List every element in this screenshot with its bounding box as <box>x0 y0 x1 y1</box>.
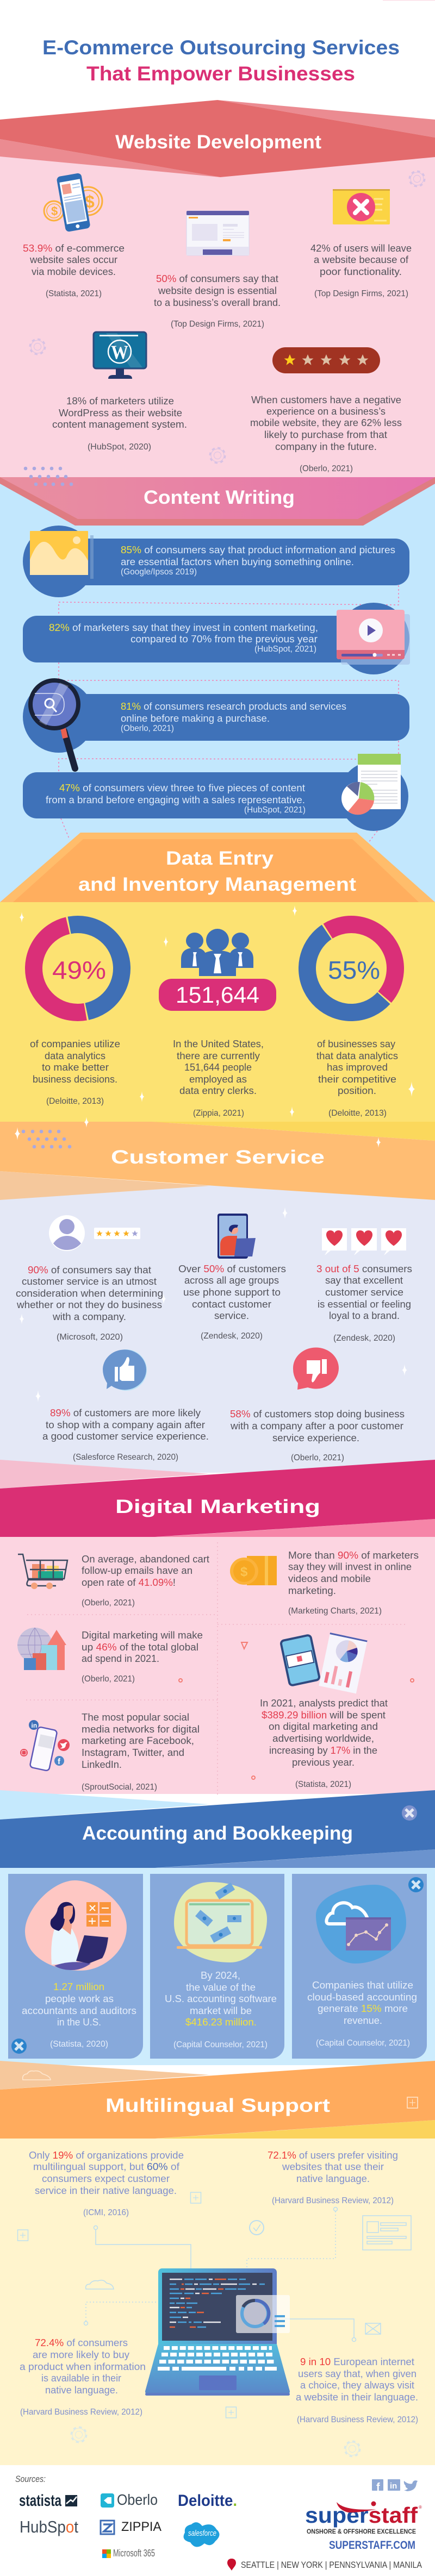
title <box>42 0 435 85</box>
icon: wordpress monitor <box>94 332 146 379</box>
icon: plus card on banner <box>407 2097 418 2108</box>
icon: cross badge blue <box>11 2039 27 2054</box>
stat: 90% of consumers: (Microsoft, 2020) <box>57 1333 123 1342</box>
stat: negative mobile experience: experience on a business’s <box>266 406 386 417</box>
chart: 55% donut: 55% <box>328 956 380 984</box>
stat: global ad spend: (Oberlo, 2021) <box>82 1674 135 1684</box>
stat: mobile sales: website sales occur <box>29 254 117 265</box>
stat: 19% of organizations: (ICMI, 2016) <box>83 2208 129 2217</box>
icon: three people <box>181 929 253 976</box>
icon: gold coins <box>230 1556 277 1585</box>
stat: social networks: (SproutSocial, 2021) <box>82 1783 157 1792</box>
stat: social networks: media networks for digital <box>82 1724 200 1735</box>
icon: error card <box>333 189 390 224</box>
stat: marketing spend: previous year. <box>292 1757 355 1768</box>
heading: content writing: Content Writing <box>144 487 295 508</box>
icon: heart speech bubbles <box>322 1228 406 1255</box>
title: E-Commerce Outsourcing Services <box>42 36 400 59</box>
text: 82% <box>49 622 318 654</box>
heading: multilingual support: Multilingual Support <box>105 2095 330 2116</box>
stat: phone support: use phone support to <box>183 1287 281 1298</box>
banner: website development <box>0 100 435 177</box>
stat: marketing spend: In 2021, analysts predict that <box>260 1698 388 1709</box>
stat: competitive position: of businesses say <box>317 1039 395 1049</box>
icon: thumbs down bubble <box>293 1347 339 1390</box>
text: 85% <box>121 545 395 577</box>
icon: shopping cart <box>18 1554 67 1589</box>
icon: video player <box>337 610 410 665</box>
text: 1.27 million: people work as <box>45 1993 114 2004</box>
icon: avatar with rating <box>49 1215 140 1251</box>
chart: 49% donut: 49% <box>52 956 106 984</box>
text: 81%: 81% of consumers research products and services <box>121 701 346 712</box>
stat: 72.1% of users: (Harvard Business Review, 2012) <box>272 2196 394 2205</box>
heading: digital marketing: Digital Marketing <box>115 1496 320 1517</box>
icon: phone support agent <box>217 1214 256 1259</box>
icon: phone with coins: $ <box>51 204 58 218</box>
stat: negative mobile experience <box>250 395 402 473</box>
stat: 72.1% of users: websites that use their <box>282 2161 384 2172</box>
stat: data analytics decisions: of companies utilize <box>30 1039 120 1049</box>
icon: gears <box>30 171 425 463</box>
stat: 19% of organizations <box>29 2150 184 2217</box>
banner: data entry <box>0 833 435 902</box>
website link: SUPERSTAFF.COM <box>329 2539 415 2552</box>
stat: abandoned cart emails: open rate of 41.09%! <box>82 1577 176 1588</box>
stat: phone support: (Zendesk, 2020) <box>201 1331 263 1341</box>
text: 15% more revenue: cloud-based accounting <box>307 1992 417 2003</box>
panel: multilingual support <box>0 2061 435 2465</box>
stat: phone support: Over 50% of customers <box>178 1264 286 1274</box>
stat: online videos <box>288 1550 419 1616</box>
icon: wordpress monitor: W <box>111 341 128 363</box>
stat: global ad spend: Digital marketing will make <box>82 1630 203 1641</box>
text: 82%: compared to 70% from the previous year <box>130 634 318 645</box>
stat: 19% of organizations: multilingual support, but 60% of <box>33 2161 180 2172</box>
code lines <box>170 2279 265 2327</box>
stat: 58% stop doing business: with a company after a poor customer <box>230 1421 403 1431</box>
panel: website development <box>0 100 435 479</box>
stat: marketing spend: advertising worldwide, <box>272 1733 374 1744</box>
icon: tablet report and phone <box>281 1633 368 1693</box>
text: software market: $416.23 million. <box>185 2017 257 2028</box>
stat: 89% shop again: a good customer service experience. <box>42 1431 209 1442</box>
stat: 3 out of 5: loyal to a brand. <box>329 1310 400 1321</box>
stat: website design: (Top Design Firms, 2021) <box>171 320 264 329</box>
stat: social networks: The most popular social <box>82 1712 189 1723</box>
text: 1.27 million: accountants and auditors <box>22 2005 136 2016</box>
stat: 89% shop again: (Salesforce Research, 2020) <box>73 1453 178 1462</box>
stat: mobile sales: 53.9% of e-commerce <box>23 243 125 254</box>
stat: 90% of consumers: with a company. <box>52 1311 126 1322</box>
panel: customer service <box>0 1117 435 1473</box>
card: product information <box>23 526 409 597</box>
stat: data entry clerks <box>173 1039 264 1118</box>
logo: superstaff: superstaff <box>305 2503 418 2528</box>
text: 15% more revenue: Companies that utilize <box>312 1980 413 1991</box>
stat: wordpress: 18% of marketers utilize <box>66 396 174 407</box>
text: software market: By 2024, <box>201 1970 240 1981</box>
logo: hubspot: HubSpot <box>20 2517 78 2536</box>
stat: 90% of consumers: 90% of consumers say that <box>28 1265 151 1276</box>
stat: mobile sales: via mobile devices. <box>32 266 116 277</box>
logo: superstaff: ONSHORE & OFFSHORE EXCELLENCE <box>307 2528 416 2535</box>
sources label: Sources: <box>15 2474 46 2484</box>
stat: global ad spend: up 46% of the total global <box>82 1642 198 1653</box>
stat: abandoned cart emails <box>82 1554 209 1608</box>
stat: phone support: across all age groups <box>184 1275 279 1286</box>
social icons: f <box>376 2481 380 2493</box>
stat: global ad spend <box>82 1630 203 1684</box>
stat: 72.4% of consumers: is available in their <box>41 2373 121 2384</box>
stat: online videos: (Marketing Charts, 2021) <box>288 1606 382 1616</box>
text: 47% <box>46 783 306 815</box>
text: 15% more revenue: (Capital Counselor, 2021) <box>316 2039 410 2048</box>
banner: content writing <box>0 477 435 526</box>
decorative dots and sparkles <box>15 1117 407 1402</box>
stat: phone support: service. <box>214 1310 249 1321</box>
text: software market: (Capital Counselor, 2021) <box>173 2040 268 2049</box>
stat: 58% stop doing business: 58% of customers stop doing business <box>230 1409 405 1420</box>
icon: social media phone <box>20 1720 70 1771</box>
stat: 3 out of 5 <box>316 1264 412 1343</box>
stat: competitive position: that data analytics <box>316 1051 398 1061</box>
logo: salesforce <box>184 2522 220 2547</box>
stat: 3 out of 5: customer service <box>325 1287 403 1298</box>
text: 1.27 million: in the U.S. <box>57 2017 101 2028</box>
stat: website design: to a business’s overall brand. <box>154 297 281 308</box>
banner: digital marketing <box>0 1460 435 1537</box>
text: software market: market will be <box>190 2005 252 2016</box>
stat: 72.1% of users: 72.1% of users prefer visiting <box>268 2150 398 2161</box>
stat: poor functionality <box>310 243 412 298</box>
stat: 72.4% of consumers: (Harvard Business Review, 2012) <box>20 2408 142 2417</box>
heading: data entry and inventory management <box>78 848 356 895</box>
stat: social networks: marketing are Facebook, <box>82 1735 194 1746</box>
icon: gold coins: $ <box>240 1565 248 1579</box>
chart: 49% donut <box>26 917 129 1020</box>
stat: data analytics decisions: data analytics <box>45 1051 105 1061</box>
text: 85%: 85% of consumers say that product information and pictures <box>121 545 395 555</box>
icon: phone with coins: $ <box>85 192 95 211</box>
stat: 3 out of 5: (Zendesk, 2020) <box>333 1334 395 1343</box>
icon: phone with coins <box>44 173 102 232</box>
stat: 89% shop again: 89% of customers are more likely <box>50 1408 201 1418</box>
icon: report and pie chart <box>341 754 401 815</box>
heading: data entry and inventory management: and Inventory Management <box>78 874 356 895</box>
text: 85%: are essential factors when buying something online. <box>121 557 354 567</box>
stat: data entry clerks: data entry clerks. <box>179 1085 257 1096</box>
stat: 9 in 10: a website in their language. <box>296 2392 418 2403</box>
stat: wordpress <box>52 396 187 452</box>
card: brand content <box>23 754 408 831</box>
sparkles <box>20 905 415 1117</box>
card: accountants <box>8 1874 143 2059</box>
callout: 151,644 <box>159 979 276 1011</box>
icon: cloud outline <box>23 2071 51 2080</box>
stat: 58% stop doing business: service experience. <box>272 1433 359 1443</box>
illustration: woman at laptop <box>25 1880 127 1971</box>
stat: online videos: videos and mobile <box>288 1573 371 1584</box>
text: 47%: 47% of consumers view three to five pieces of content <box>59 783 305 793</box>
heading: data entry and inventory management: Data Entry <box>166 848 274 869</box>
card: content marketing <box>23 603 410 674</box>
illustration: cloud and chart <box>316 1885 406 1964</box>
stat: phone support <box>178 1264 286 1341</box>
icon: thumbs up bubble <box>103 1349 147 1391</box>
icon: location pin <box>227 2559 236 2571</box>
stat: 89% shop again: to shop with a company again after <box>46 1420 205 1430</box>
stat: mobile sales <box>23 243 125 298</box>
stat: data analytics decisions: (Deloitte, 2013) <box>46 1097 104 1106</box>
stat: marketing spend: $389.29 billion will be spent <box>262 1710 386 1721</box>
stat: 90% of consumers <box>16 1265 163 1342</box>
text: 15% more revenue: revenue. <box>344 2015 382 2026</box>
stat: 19% of organizations: service in their native language. <box>35 2185 177 2196</box>
stat: data entry clerks: 151,644 people <box>184 1062 252 1073</box>
stat: poor functionality: poor functionality. <box>320 266 402 277</box>
stat: data analytics decisions: business decisions. <box>33 1074 117 1085</box>
stat: marketing spend: on digital marketing and <box>269 1721 378 1732</box>
text: 82%: (HubSpot, 2021) <box>254 645 316 654</box>
stat: data entry clerks: employed as <box>189 1074 247 1085</box>
text: 81%: online before making a purchase. <box>121 713 270 724</box>
text: 47%: (HubSpot, 2021) <box>244 805 306 815</box>
icon: browser window <box>187 211 249 255</box>
card: accounting software <box>150 1874 284 2059</box>
panel: data entry and inventory management <box>0 833 435 1123</box>
stat: data entry clerks: (Zippia, 2021) <box>193 1109 244 1118</box>
stat: poor functionality: 42% of users will leave <box>310 243 412 254</box>
decorative connectors and icons <box>17 2192 411 2456</box>
stat: competitive position: their competitive <box>318 1074 396 1085</box>
card: cloud accounting <box>292 1874 427 2059</box>
stat: marketing spend: (Statista, 2021) <box>295 1780 351 1789</box>
stat: online videos: More than 90% of marketers <box>288 1550 419 1561</box>
panel: accounting and bookkeeping <box>0 1790 435 2065</box>
logo: oberlo: Oberlo <box>117 2491 158 2508</box>
stat: 72.4% of consumers: 72.4% of consumers <box>35 2337 128 2348</box>
stat: phone support: contact customer <box>192 1299 271 1310</box>
logo: oberlo <box>101 2491 158 2508</box>
stat: 89% shop again <box>42 1408 209 1462</box>
text: 1.27 million <box>22 1981 136 2049</box>
overlay panel <box>236 2295 290 2333</box>
stat: competitive position: has improved <box>327 1062 388 1073</box>
icon: picture <box>30 531 94 579</box>
text: 85%: (Google/Ipsos 2019) <box>121 567 197 577</box>
stat: 9 in 10: a choice, they always visit <box>300 2380 414 2391</box>
stat: 58% stop doing business <box>230 1409 405 1462</box>
stat: 9 in 10: (Harvard Business Review, 2012) <box>297 2415 418 2424</box>
heading: accounting and bookkeeping: Accounting and Bookkeeping <box>82 1823 353 1844</box>
stat: 90% of consumers: consideration when determining <box>16 1288 163 1299</box>
footer: sources and branding <box>15 2474 422 2571</box>
stat: 72.1% of users <box>268 2150 398 2205</box>
stat: wordpress: (HubSpot, 2020) <box>88 442 151 452</box>
icon: star rating <box>272 347 380 373</box>
stat: poor functionality: a website because of <box>314 254 409 265</box>
stat: data analytics decisions <box>30 1039 120 1106</box>
text: 15% more revenue: generate 15% more <box>318 2003 408 2014</box>
icon: social media phone: f <box>58 1757 61 1766</box>
icon: magnifier <box>30 680 78 768</box>
text: 81% <box>121 701 346 733</box>
panel: content writing <box>0 467 435 906</box>
panel: digital marketing <box>0 1460 435 1797</box>
stat: negative mobile experience: (Oberlo, 2021) <box>300 464 353 473</box>
stat: online videos: say they will invest in online <box>288 1561 412 1572</box>
stat: abandoned cart emails: (Oberlo, 2021) <box>82 1598 135 1608</box>
stat: negative mobile experience: company in the future. <box>275 441 377 452</box>
stat: social networks <box>82 1712 200 1792</box>
icon: social media phone: in <box>32 1722 37 1729</box>
logo: statista: statista <box>19 2492 61 2510</box>
stat: wordpress: WordPress as their website <box>59 408 182 418</box>
stat: 72.4% of consumers <box>20 2337 146 2417</box>
logo: salesforce: salesforce <box>188 2529 216 2538</box>
banner: accounting <box>0 1790 435 1868</box>
stat: online videos: marketing. <box>288 1585 336 1596</box>
stat: website design: website design is essential <box>158 285 277 296</box>
stat: competitive position: position. <box>338 1085 376 1096</box>
stat: global ad spend: ad spend in 2021. <box>82 1653 159 1664</box>
stat: 9 in 10: 9 in 10 European internet <box>300 2356 414 2367</box>
stat: website design: 50% of consumers say that <box>156 273 278 284</box>
stat: 72.4% of consumers: native language. <box>45 2385 118 2396</box>
text: 15% more revenue <box>307 1980 417 2048</box>
social icons <box>372 2479 418 2493</box>
stat: competitive position <box>316 1039 398 1118</box>
stat: abandoned cart emails: On average, abandoned cart <box>82 1554 209 1565</box>
stat: website design <box>154 273 281 329</box>
banner: customer service <box>0 1122 435 1200</box>
title: That Empower Businesses <box>86 62 355 85</box>
icon: cross badge top <box>408 1877 424 1892</box>
icon: globe and growth chart <box>17 1628 66 1670</box>
stat: 3 out of 5: say that excellent <box>325 1275 403 1286</box>
stat: 72.4% of consumers: are more likely to buy <box>33 2349 129 2360</box>
stat: competitive position: (Deloitte, 2013) <box>328 1109 387 1118</box>
stat: data entry clerks: In the United States, <box>173 1039 264 1049</box>
stat: 9 in 10 <box>296 2356 418 2424</box>
stat: negative mobile experience: likely to purchase from that <box>264 429 387 440</box>
text: software market: the value of the <box>186 1982 256 1993</box>
stat: 72.4% of consumers: a product when information <box>20 2361 146 2372</box>
logo: zippia <box>101 2519 161 2534</box>
stat: 19% of organizations: Only 19% of organizations provide <box>29 2150 184 2161</box>
decorative dots <box>24 467 73 486</box>
stat: data analytics decisions: to make better <box>42 1062 109 1073</box>
stat: 19% of organizations: consumers expect customer <box>42 2173 170 2184</box>
logo: microsoft 365: Microsoft 365 <box>113 2548 155 2559</box>
stat: marketing spend: increasing by 17% in the <box>269 1745 377 1756</box>
logo: superstaff: ® <box>419 2505 422 2510</box>
heading: website development: Website Development <box>115 132 321 153</box>
card: online research <box>23 680 409 768</box>
text: 1.27 million: 1.27 million <box>53 1981 104 1992</box>
logo: deloitte: Deloitte. <box>178 2492 237 2510</box>
stat: 72.1% of users: native language. <box>296 2173 370 2184</box>
text: 82%: 82% of marketers say that they invest in content marketing, <box>49 622 318 633</box>
stat: 90% of consumers: customer service is an utmost <box>22 1276 157 1287</box>
illustration: laptop <box>145 2268 290 2396</box>
logo: microsoft 365 <box>102 2548 155 2559</box>
illustration: laptop with money <box>174 1882 267 1962</box>
text: 1.27 million: (Statista, 2020) <box>50 2040 108 2049</box>
logo: superstaff <box>305 2501 422 2535</box>
logo: zippia: ZIPPIA <box>121 2519 161 2534</box>
stat: negative mobile experience: When customers have a negative <box>251 395 401 405</box>
stat: social networks: LinkedIn. <box>82 1759 122 1770</box>
callout: 151,644: 151,644 <box>176 982 259 1008</box>
text: software market <box>165 1970 277 2049</box>
text: software market: U.S. accounting software <box>165 1993 277 2004</box>
keyboard <box>158 2348 277 2368</box>
stat: 58% stop doing business: (Oberlo, 2021) <box>291 1453 344 1462</box>
stat: 90% of consumers: whether or not they do business <box>16 1299 162 1310</box>
stat: social networks: Instagram, Twitter, and <box>82 1747 184 1758</box>
decorative small shapes <box>179 1642 414 1779</box>
stat: poor functionality: (Top Design Firms, 2021) <box>314 289 408 298</box>
stat: marketing spend <box>260 1698 388 1789</box>
text: 47%: from a brand before engaging with a sales representative. <box>46 795 305 805</box>
social icons: in <box>390 2481 397 2491</box>
stat: abandoned cart emails: follow-up emails have an <box>82 1565 192 1576</box>
stat: 3 out of 5: is essential or feeling <box>318 1299 411 1310</box>
chart: 55% donut <box>289 906 413 1030</box>
stat: 3 out of 5: 3 out of 5 consumers <box>316 1264 412 1274</box>
text: 81%: (Oberlo, 2021) <box>121 724 174 733</box>
banner: multilingual <box>0 2061 435 2139</box>
stat: mobile sales: (Statista, 2021) <box>46 289 102 298</box>
icon: cross badge <box>402 1805 417 1821</box>
heading: customer service: Customer Service <box>111 1147 325 1168</box>
stat: negative mobile experience: mobile website, they are 62% less <box>250 417 402 428</box>
stat: wordpress: content management system. <box>52 419 187 430</box>
stat: data entry clerks: there are currently <box>177 1051 260 1061</box>
stat: 9 in 10: users say that, when given <box>298 2368 417 2379</box>
